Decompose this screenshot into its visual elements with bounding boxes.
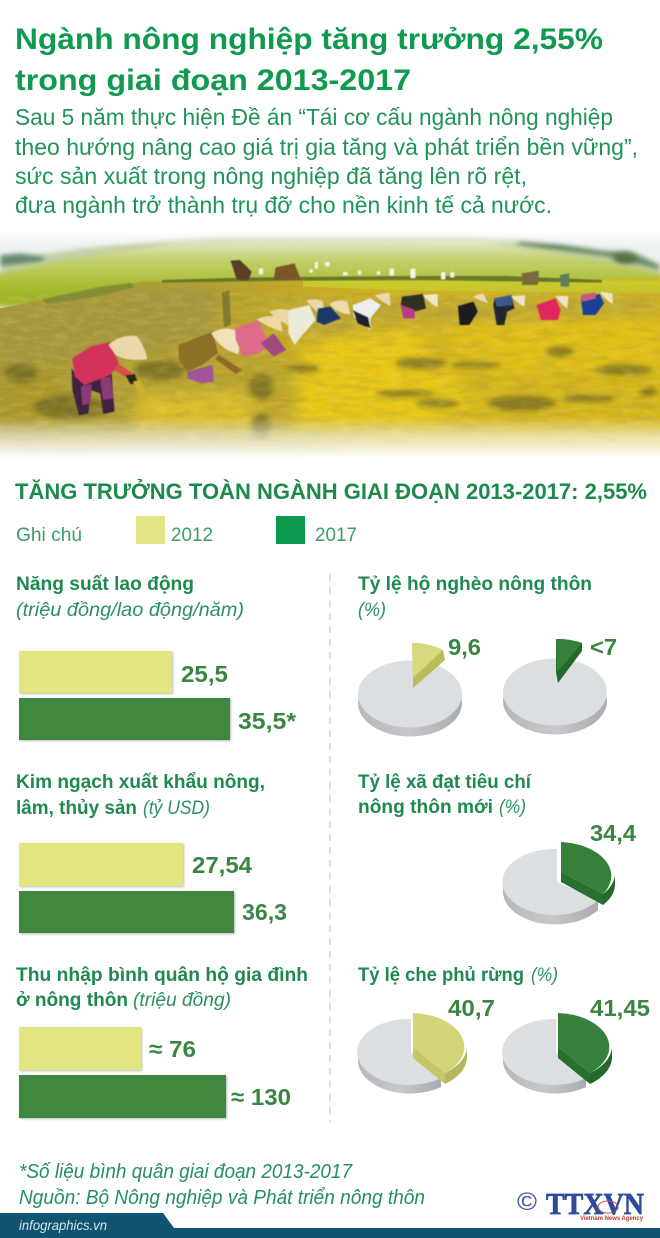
panel: forest cover [357,964,650,1094]
panel: export turnover [16,771,287,933]
pie: poverty 2017 [503,639,607,734]
panel: export turnover: 36,3 [242,899,287,925]
pie: poverty 2012 [358,643,462,736]
legend [16,516,357,546]
panel: household income: (triệu đồng) [133,989,231,1011]
panel: forest cover: 40,7 [448,995,495,1021]
panel: export turnover: 27,54 [192,852,252,878]
panel: labour productivity: Năng suất lao động [16,573,194,595]
panel: new rural communes: Tỷ lệ xã đạt tiêu chí [358,771,532,793]
farmers [72,292,613,415]
panel: export turnover: lâm, thủy sản [16,797,137,819]
legend: Ghi chú [16,524,82,546]
panel: labour productivity: 35,5* [238,708,297,734]
pie: forest cover 2017 [502,1013,612,1094]
panel: forest cover: (%) [531,964,558,986]
panel: export turnover: (tỷ USD) [143,797,210,819]
panel: labour productivity: (triệu đồng/lao động/năm) [16,599,244,621]
footnote and source: Nguồn: Bộ Nông nghiệp và Phát triển nông thôn [19,1186,425,1209]
legend: 2012 [171,524,213,546]
legend: 2017 [315,524,357,546]
pie: forest cover 2012 [357,1013,467,1094]
logo: TTXVN: TTXVN [546,1186,644,1221]
panel: rural poverty rate: Tỷ lệ hộ nghèo nông thôn [358,573,592,595]
pie: new rural communes 2017 [502,842,615,924]
panel: rural poverty rate: <7 [590,634,617,660]
panel: household income [16,964,308,1118]
panel: household income: ≈ 130 [231,1084,291,1110]
field bank, cattle and egrets [42,260,602,327]
panel: new rural communes: (%) [499,796,526,818]
footer bar: infographics.vn [19,1217,107,1233]
panel: export turnover: Kim ngạch xuất khẩu nông, [16,771,265,793]
footer bar [0,1213,660,1238]
section heading: TĂNG TRƯỞNG TOÀN NGÀNH GIAI ĐOẠN 2013-2017: 2,55% [15,479,647,504]
footnote and source: *Số liệu bình quân giai đoạn 2013-2017 [19,1160,353,1183]
panel: labour productivity: 25,5 [181,661,228,687]
footnote and source [19,1160,425,1209]
panel: labour productivity [16,573,297,740]
intro text: sức sản xuất trong nông nghiệp đã tăng lên rõ rệt, [15,163,527,189]
panel: rural poverty rate: (%) [358,599,386,621]
panel: forest cover: Tỷ lệ che phủ rừng [358,964,524,986]
center divider [329,574,331,1122]
panel: new rural communes: nông thôn mới [358,796,493,818]
panel: household income: ở nông thôn [16,989,128,1011]
logo: TTXVN [517,1186,644,1222]
intro text: đưa ngành trở thành trụ đỡ cho nền kinh tế cả nước. [15,192,552,218]
panel: new rural communes: 34,4 [590,820,636,846]
panel: household income: ≈ 76 [149,1036,196,1062]
logo: TTXVN: Vietnam News Agency [580,1215,643,1222]
panel: household income: Thu nhập bình quân hộ gia đình [16,964,308,986]
rice light and shade patches [0,288,660,430]
logo: TTXVN: © [517,1188,538,1216]
intro text: Sau 5 năm thực hiện Đề án “Tái cơ cấu ngành nông nghiệp [15,104,613,130]
title: trong giai đoạn 2013-2017 [15,64,411,97]
photo: farmers harvesting rice [0,230,660,470]
panel: rural poverty rate [358,573,617,736]
title [15,23,603,97]
intro text: theo hướng nâng cao giá trị gia tăng và phát triển bền vững”, [15,134,638,160]
panel: forest cover: 41,45 [590,995,650,1021]
panel: rural poverty rate: 9,6 [448,634,481,660]
intro text [15,104,638,218]
distant tree lines [0,236,660,277]
title: Ngành nông nghiệp tăng trưởng 2,55% [15,23,603,56]
panel: new rural communes [358,771,636,924]
